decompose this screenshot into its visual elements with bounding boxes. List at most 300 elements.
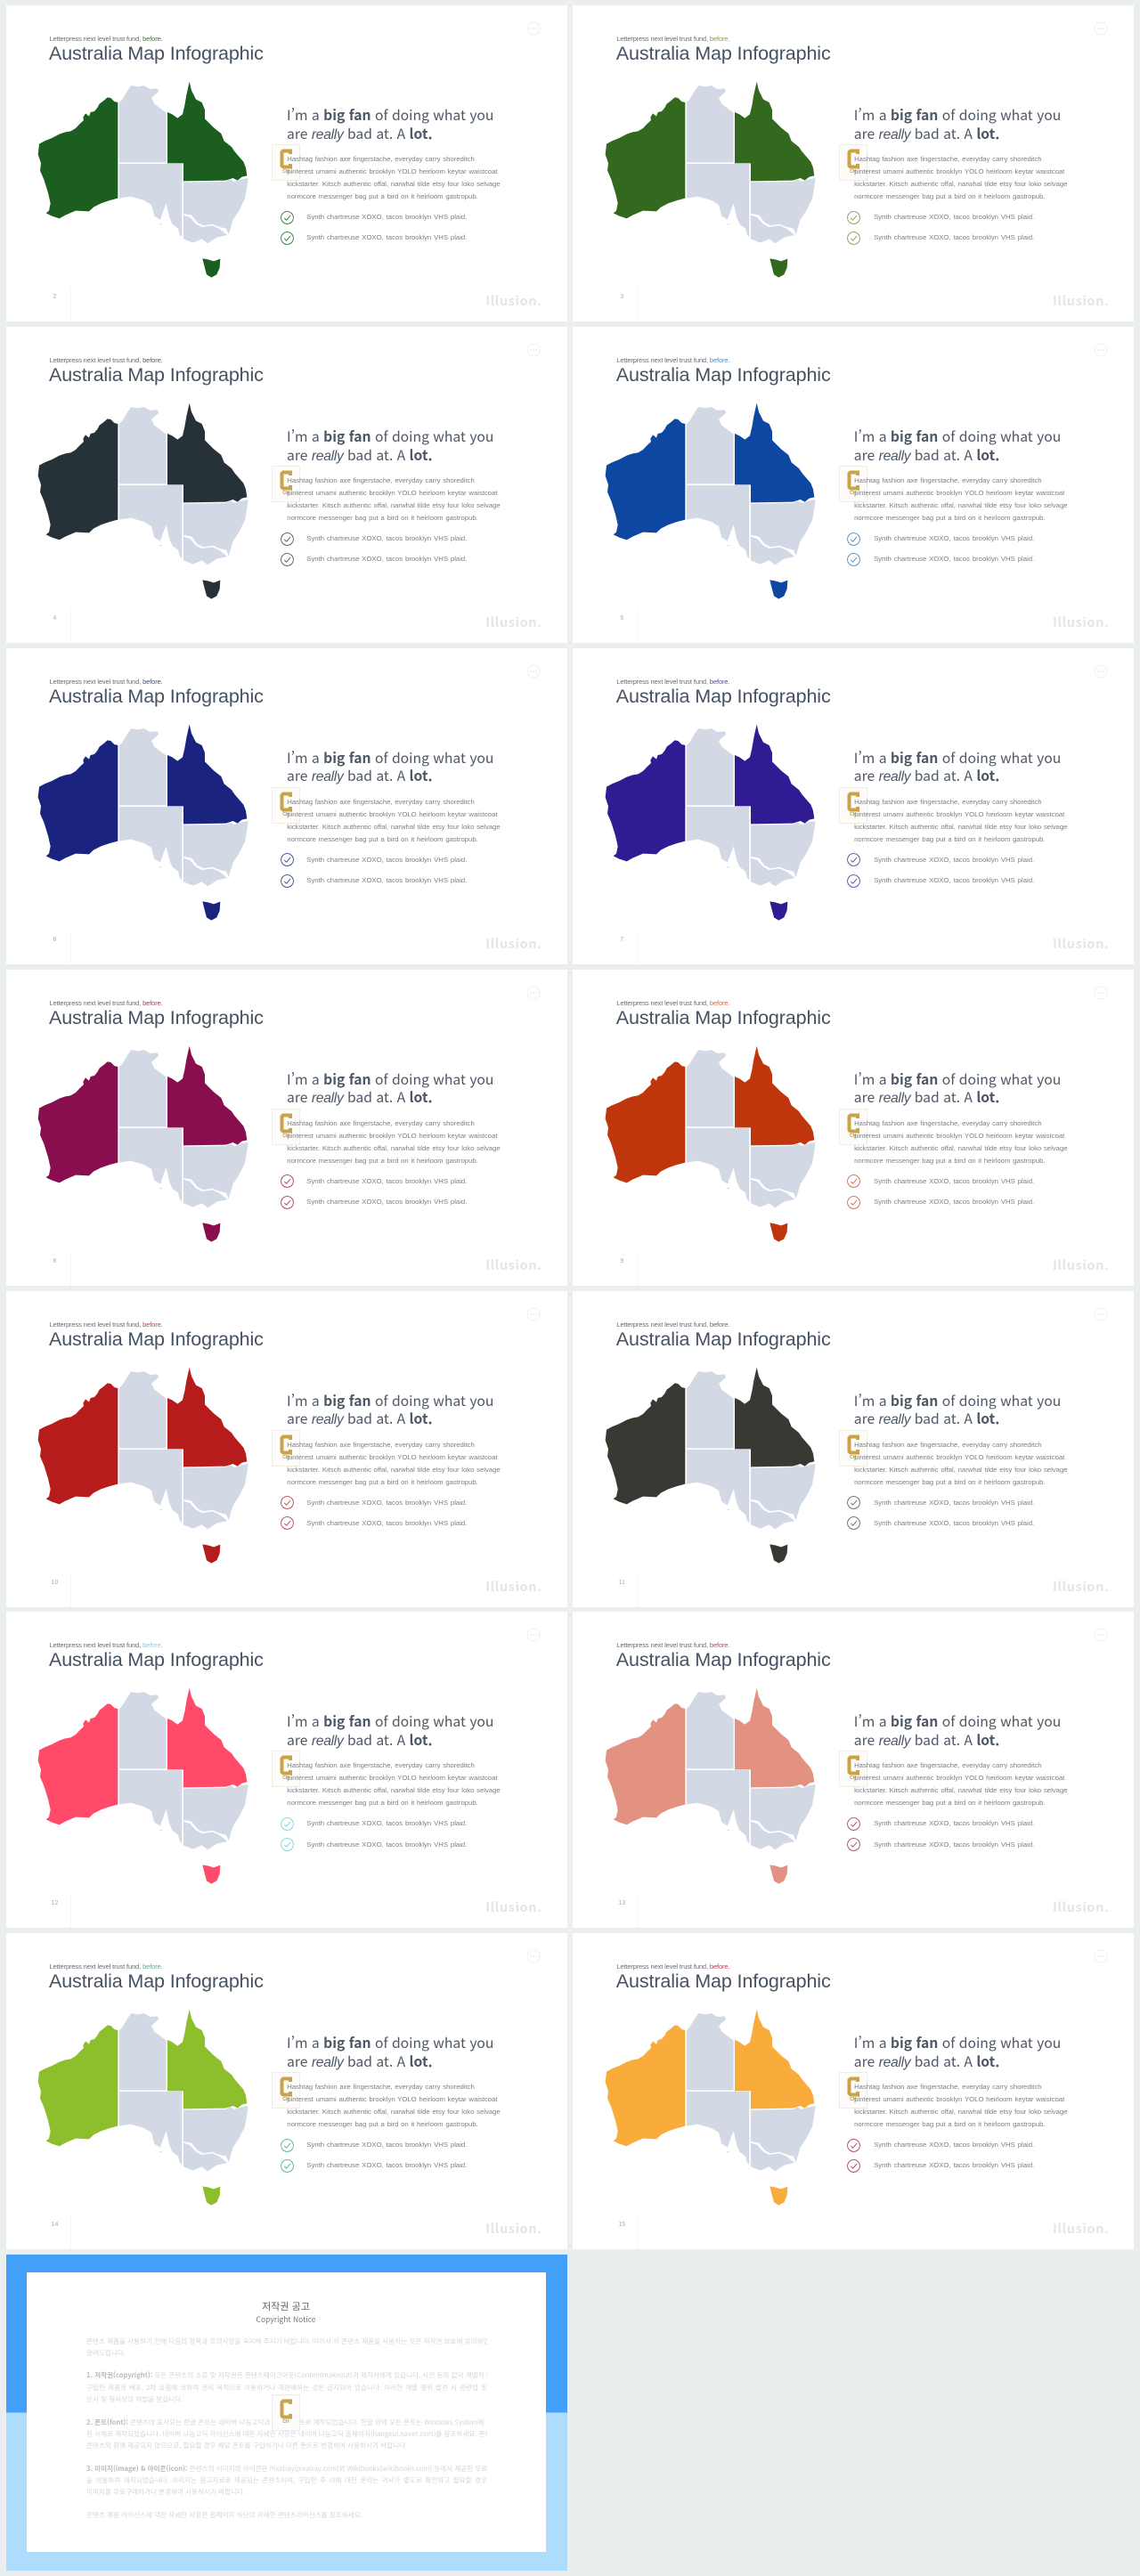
list item 2: Synth chartreuse XOXO, tacos brooklyn VHS plaid.	[874, 1519, 1034, 1527]
body text: pinterest umami authentic brooklyn YOLO heirloom keytar waistcoat	[287, 2095, 498, 2103]
list item 2: Synth chartreuse XOXO, tacos brooklyn VHS plaid.	[306, 1519, 467, 1527]
icon: menu dots	[1094, 1307, 1108, 1321]
title: Australia Map Infographic	[616, 686, 831, 707]
check icon 2	[281, 874, 294, 888]
panel: slide 11 dark olive grey	[573, 1291, 1134, 1607]
body text	[854, 476, 1068, 522]
body text: kickstarter. Kitsch authentic offal, narwhal tilde etsy four loko selvage	[287, 2108, 501, 2116]
list item 1: Synth chartreuse XOXO, tacos brooklyn VHS plaid.	[874, 2141, 1034, 2149]
watermark badge	[839, 787, 867, 824]
eyebrow text: Letterpress next level trust fund, before.	[616, 35, 729, 43]
watermark badge: CH	[282, 1455, 289, 1460]
page number: 2	[53, 294, 56, 300]
watermark badge: CH	[850, 1455, 856, 1460]
map of Australia	[37, 402, 248, 599]
footer rule	[70, 1573, 71, 1607]
watermark badge: CH	[282, 169, 289, 175]
list item 2: Synth chartreuse XOXO, tacos brooklyn VHS plaid.	[874, 1841, 1034, 1849]
map of Australia	[606, 82, 816, 278]
body text: normcore messenger bag put a bird on it heirloom gastropub.	[287, 1478, 478, 1486]
icon: menu dots	[526, 986, 541, 1000]
panel: slide 2 dark green	[5, 5, 566, 321]
logo: Illusion.	[1053, 2219, 1109, 2238]
list item 1: Synth chartreuse XOXO, tacos brooklyn VHS plaid.	[874, 1499, 1034, 1507]
title: Australia Map Infographic	[49, 1007, 264, 1028]
list item 1: Synth chartreuse XOXO, tacos brooklyn VHS plaid.	[306, 1819, 467, 1827]
title: Australia Map Infographic	[616, 1007, 831, 1028]
logo: Illusion.	[1053, 1255, 1109, 1274]
heading	[854, 747, 1061, 785]
eyebrow text: Letterpress next level trust fund, before.	[616, 678, 729, 686]
heading: are really bad at. A lot.	[854, 765, 999, 785]
map of Australia	[594, 1981, 835, 2222]
footer rule	[70, 2215, 71, 2249]
panel: slide 15 amber	[573, 1933, 1134, 2249]
body text: normcore messenger bag put a bird on it heirloom gastropub.	[287, 514, 478, 522]
logo: Illusion.	[485, 1577, 542, 1596]
list item 2: Synth chartreuse XOXO, tacos brooklyn VHS plaid.	[306, 555, 467, 563]
title: Australia Map Infographic	[616, 364, 831, 386]
list item 1: Synth chartreuse XOXO, tacos brooklyn VHS plaid.	[306, 2141, 467, 2149]
heading: I’m a big fan of doing what you	[287, 2032, 493, 2052]
icon: menu dots	[1094, 1949, 1108, 1963]
body text	[854, 1759, 1068, 1809]
body text	[854, 155, 1068, 200]
body text: pinterest umami authentic brooklyn YOLO heirloom keytar waistcoat	[854, 1774, 1064, 1782]
icon: menu dots	[526, 1307, 541, 1321]
list item 2: Synth chartreuse XOXO, tacos brooklyn VHS plaid.	[306, 2161, 467, 2169]
logo: Illusion.	[1053, 934, 1109, 953]
white notice card	[27, 2272, 546, 2552]
check icon 2	[847, 874, 860, 888]
panel: slide 5 blue	[573, 327, 1134, 643]
check icon 2	[847, 553, 860, 566]
body text: normcore messenger bag put a bird on it heirloom gastropub.	[854, 514, 1046, 522]
map of Australia	[606, 402, 816, 599]
footer rule	[638, 1573, 639, 1607]
heading	[854, 104, 1061, 142]
list item 1: Synth chartreuse XOXO, tacos brooklyn VHS plaid.	[306, 1177, 467, 1185]
list item 2: Synth chartreuse XOXO, tacos brooklyn VHS plaid.	[306, 876, 467, 884]
logo: Illusion.	[485, 613, 542, 631]
body text: pinterest umami authentic brooklyn YOLO heirloom keytar waistcoat	[854, 489, 1064, 497]
check icon 1	[847, 1817, 860, 1831]
heading: are really bad at. A lot.	[854, 443, 999, 465]
icon: menu dots	[527, 344, 540, 356]
panel: slide 4 charcoal	[5, 327, 566, 643]
body text	[287, 1759, 501, 1809]
watermark badge: CH	[850, 1134, 856, 1139]
body text: normcore messenger bag put a bird on it heirloom gastropub.	[287, 835, 478, 843]
logo: Illusion.	[1053, 1897, 1109, 1916]
heading	[287, 1392, 493, 1430]
panel: slide 8 magenta	[5, 970, 566, 1286]
icon: menu dots	[1094, 21, 1108, 36]
body text	[287, 1117, 501, 1167]
body text	[854, 1439, 1068, 1489]
footer rule	[70, 1894, 71, 1928]
eyebrow text: Letterpress next level trust fund, before.	[616, 356, 729, 364]
heading	[287, 747, 493, 785]
list item 1: Synth chartreuse XOXO, tacos brooklyn VHS plaid.	[306, 1499, 467, 1507]
check icon 2	[847, 1516, 860, 1530]
body text: Hashtag fashion axe fingerstache, everyday carry shoreditch	[854, 1761, 1042, 1769]
body text: normcore messenger bag put a bird on it heirloom gastropub.	[854, 1157, 1046, 1165]
watermark badge: CH	[850, 491, 856, 496]
body text: pinterest umami authentic brooklyn YOLO heirloom keytar waistcoat	[287, 167, 498, 175]
footer rule	[70, 930, 71, 964]
watermark badge: CH	[282, 812, 289, 817]
list item 1: Synth chartreuse XOXO, tacos brooklyn VHS plaid.	[306, 213, 467, 221]
list item 1: Synth chartreuse XOXO, tacos brooklyn VHS plaid.	[874, 1177, 1034, 1185]
body text	[287, 155, 501, 200]
title: Australia Map Infographic	[616, 1649, 831, 1670]
page number: 3	[620, 294, 623, 300]
heading: are really bad at. A lot.	[287, 765, 433, 785]
page number: 8	[53, 1258, 56, 1264]
check icon 2	[281, 553, 294, 566]
list item 2: Synth chartreuse XOXO, tacos brooklyn VHS plaid.	[306, 233, 467, 241]
icon: menu dots	[1094, 664, 1108, 679]
body text: Hashtag fashion axe fingerstache, everyday carry shoreditch	[287, 155, 475, 163]
body text: Hashtag fashion axe fingerstache, everyday carry shoreditch	[287, 798, 475, 806]
footer rule	[70, 609, 71, 643]
heading: are really bad at. A lot.	[287, 443, 433, 465]
page number: 10	[52, 1580, 58, 1586]
title: Australia Map Infographic	[49, 43, 264, 64]
body text: pinterest umami authentic brooklyn YOLO heirloom keytar waistcoat	[287, 810, 498, 818]
body text	[287, 798, 501, 843]
body text: Hashtag fashion axe fingerstache, everyday carry shoreditch	[854, 1441, 1042, 1449]
title: Australia Map Infographic	[616, 1329, 831, 1350]
watermark badge	[272, 1751, 300, 1787]
body text: normcore messenger bag put a bird on it heirloom gastropub.	[287, 1799, 478, 1807]
body text	[854, 798, 1068, 843]
watermark badge	[272, 466, 300, 502]
body text: Hashtag fashion axe fingerstache, everyday carry shoreditch	[854, 155, 1042, 163]
panel: slide 6 navy	[5, 648, 566, 964]
panel: slide 14 lime	[5, 1933, 566, 2249]
map of Australia	[27, 1981, 267, 2222]
check icon 1	[281, 211, 294, 224]
eyebrow text: Letterpress next level trust fund, before.	[50, 35, 163, 43]
footer rule	[638, 288, 639, 321]
heading: are really bad at. A lot.	[854, 123, 999, 142]
heading: I’m a big fan of doing what you	[854, 2032, 1061, 2052]
map of Australia	[27, 1339, 267, 1580]
eyebrow text: Letterpress next level trust fund, before.	[616, 1321, 729, 1329]
page number: 6	[53, 937, 56, 943]
map of Australia	[27, 1660, 267, 1900]
heading: I’m a big fan of doing what you	[287, 747, 493, 768]
body text: Hashtag fashion axe fingerstache, everyday carry shoreditch	[854, 798, 1042, 806]
watermark badge	[839, 144, 867, 181]
panel: slide 7 indigo	[573, 648, 1134, 964]
title: Australia Map Infographic	[49, 1649, 264, 1670]
watermark badge	[839, 1109, 867, 1145]
eyebrow text: Letterpress next level trust fund, before.	[50, 1641, 163, 1649]
watermark badge	[839, 1430, 867, 1467]
icon: menu dots	[526, 1949, 541, 1963]
list item 1: Synth chartreuse XOXO, tacos brooklyn VHS plaid.	[306, 856, 467, 864]
list item 2: Synth chartreuse XOXO, tacos brooklyn VHS plaid.	[874, 876, 1034, 884]
heading	[854, 1712, 1061, 1751]
eyebrow text: Letterpress next level trust fund, before.	[50, 356, 163, 364]
list item 2: Synth chartreuse XOXO, tacos brooklyn VHS plaid.	[874, 555, 1034, 563]
watermark badge	[272, 144, 300, 181]
body text: pinterest umami authentic brooklyn YOLO heirloom keytar waistcoat	[287, 489, 498, 497]
check icon 1	[847, 1496, 860, 1509]
body text: kickstarter. Kitsch authentic offal, narwhal tilde etsy four loko selvage	[854, 2108, 1068, 2116]
body text: normcore messenger bag put a bird on it heirloom gastropub.	[287, 2120, 478, 2128]
title: Australia Map Infographic	[616, 43, 831, 64]
eyebrow text: Letterpress next level trust fund, before.	[616, 1962, 729, 1971]
logo: Illusion.	[1053, 613, 1109, 631]
body text: normcore messenger bag put a bird on it heirloom gastropub.	[854, 1478, 1046, 1486]
check icon 2	[280, 1516, 294, 1530]
body text: pinterest umami authentic brooklyn YOLO heirloom keytar waistcoat	[287, 1132, 498, 1140]
heading: notice title: 저작권 공고	[262, 2299, 310, 2313]
panel: slide 13 salmon	[573, 1612, 1134, 1928]
body text	[287, 2081, 501, 2131]
heading: I’m a big fan of doing what you	[854, 104, 1061, 125]
body text: normcore messenger bag put a bird on it heirloom gastropub.	[287, 192, 478, 200]
body text: pinterest umami authentic brooklyn YOLO heirloom keytar waistcoat	[854, 810, 1064, 818]
page number: 9	[620, 1258, 623, 1264]
list item 1: Synth chartreuse XOXO, tacos brooklyn VHS plaid.	[874, 1819, 1034, 1827]
logo: Illusion.	[485, 934, 542, 953]
watermark badge: CH	[282, 1776, 289, 1781]
check icon 1	[847, 532, 860, 546]
footer rule	[70, 288, 71, 321]
body text: kickstarter. Kitsch authentic offal, narwhal tilde etsy four loko selvage	[287, 501, 501, 509]
body text: normcore messenger bag put a bird on it heirloom gastropub.	[854, 835, 1046, 843]
watermark badge on notice	[272, 2394, 300, 2431]
check icon 2	[280, 1196, 294, 1209]
body text: Hashtag fashion axe fingerstache, everyday carry shoreditch	[287, 476, 475, 484]
map of Australia	[594, 1660, 835, 1900]
eyebrow text: Letterpress next level trust fund, before.	[50, 999, 163, 1007]
check icon 1	[280, 1496, 294, 1509]
heading	[854, 2034, 1061, 2072]
map of Australia	[37, 725, 248, 921]
list item 2: Synth chartreuse XOXO, tacos brooklyn VHS plaid.	[306, 1841, 467, 1849]
heading: are really bad at. A lot.	[287, 1729, 433, 1750]
heading: are really bad at. A lot.	[854, 2051, 999, 2071]
logo: Illusion.	[485, 1897, 542, 1916]
watermark badge: CH	[282, 1134, 289, 1139]
heading: are really bad at. A lot.	[854, 1408, 999, 1428]
watermark badge: CH	[850, 169, 856, 175]
heading	[287, 104, 493, 142]
page number: 4	[53, 615, 56, 622]
footer rule	[638, 2215, 639, 2249]
body text: Hashtag fashion axe fingerstache, everyday carry shoreditch	[287, 1761, 475, 1769]
panel: slide 9 burnt orange	[573, 970, 1134, 1286]
check icon 1	[280, 2139, 294, 2152]
body text: kickstarter. Kitsch authentic offal, narwhal tilde etsy four loko selvage	[854, 1466, 1068, 1474]
heading: I’m a big fan of doing what you	[854, 1069, 1061, 1089]
heading	[287, 1712, 493, 1751]
eyebrow text: Letterpress next level trust fund, before.	[50, 678, 163, 686]
body text: normcore messenger bag put a bird on it heirloom gastropub.	[287, 1157, 478, 1165]
check icon 1	[847, 2139, 860, 2152]
eyebrow text: Letterpress next level trust fund, before.	[616, 999, 729, 1007]
eyebrow text: Letterpress next level trust fund, before.	[50, 1962, 163, 1971]
list item 1: Synth chartreuse XOXO, tacos brooklyn VHS plaid.	[874, 856, 1034, 864]
page number: 12	[52, 1900, 58, 1906]
footer rule	[638, 1894, 639, 1928]
body text: kickstarter. Kitsch authentic offal, narwhal tilde etsy four loko selvage	[854, 501, 1068, 509]
check icon 1	[280, 1817, 294, 1831]
page number: 7	[620, 937, 623, 943]
watermark badge	[839, 2072, 867, 2109]
logo: Illusion.	[1053, 291, 1109, 310]
check icon 1	[847, 853, 860, 866]
list item 2: Synth chartreuse XOXO, tacos brooklyn VHS plaid.	[306, 1198, 467, 1206]
icon: menu dots	[526, 1628, 541, 1642]
subheading: Copyright Notice: Copyright Notice	[256, 2314, 315, 2325]
body text: kickstarter. Kitsch authentic offal, narwhal tilde etsy four loko selvage	[854, 180, 1068, 188]
body text: pinterest umami authentic brooklyn YOLO heirloom keytar waistcoat	[287, 1774, 498, 1782]
logo: Illusion.	[1053, 1577, 1109, 1596]
watermark badge: CH	[850, 2097, 856, 2102]
watermark badge	[272, 2072, 300, 2109]
page number: 5	[620, 615, 623, 622]
body text	[287, 476, 501, 522]
body text: Hashtag fashion axe fingerstache, everyday carry shoreditch	[287, 2083, 475, 2091]
page number: 14	[52, 2222, 58, 2228]
footer rule	[638, 1252, 639, 1286]
watermark badge on notice: CH	[282, 2419, 289, 2425]
logo: Illusion.	[485, 2219, 542, 2238]
heading: I’m a big fan of doing what you	[287, 1711, 493, 1731]
panel: copyright notice	[5, 2255, 566, 2571]
check icon 2	[280, 2159, 294, 2173]
body text: Hashtag fashion axe fingerstache, everyday carry shoreditch	[854, 476, 1042, 484]
heading: are really bad at. A lot.	[287, 1408, 433, 1428]
heading: are really bad at. A lot.	[854, 1729, 999, 1750]
watermark badge: CH	[282, 491, 289, 496]
heading	[287, 2034, 493, 2072]
title: Australia Map Infographic	[616, 1971, 831, 1992]
list item 1: Synth chartreuse XOXO, tacos brooklyn VHS plaid.	[874, 534, 1034, 542]
watermark badge	[839, 1751, 867, 1787]
check icon 2	[847, 2159, 860, 2173]
map of Australia	[594, 1018, 835, 1258]
body text: kickstarter. Kitsch authentic offal, narwhal tilde etsy four loko selvage	[287, 823, 501, 831]
body text: kickstarter. Kitsch authentic offal, narwhal tilde etsy four loko selvage	[287, 1144, 501, 1152]
body text: kickstarter. Kitsch authentic offal, narwhal tilde etsy four loko selvage	[854, 823, 1068, 831]
heading: are really bad at. A lot.	[287, 2051, 433, 2071]
body text: kickstarter. Kitsch authentic offal, narwhal tilde etsy four loko selvage	[287, 1786, 501, 1794]
map of Australia	[594, 1339, 835, 1580]
icon: menu dots	[1094, 344, 1108, 356]
heading	[854, 1392, 1061, 1430]
body text	[287, 1439, 501, 1489]
body text: Hashtag fashion axe fingerstache, everyday carry shoreditch	[287, 1441, 475, 1449]
watermark badge: CH	[282, 2097, 289, 2102]
body text: Hashtag fashion axe fingerstache, everyday carry shoreditch	[854, 1119, 1042, 1127]
title: Australia Map Infographic	[49, 1971, 264, 1992]
icon: menu dots	[527, 21, 540, 36]
body text: kickstarter. Kitsch authentic offal, narwhal tilde etsy four loko selvage	[854, 1144, 1068, 1152]
check icon 2	[847, 1196, 860, 1209]
check icon 2	[281, 232, 294, 245]
watermark badge	[272, 787, 300, 824]
heading	[854, 1070, 1061, 1109]
body text: pinterest umami authentic brooklyn YOLO heirloom keytar waistcoat	[854, 1453, 1064, 1461]
body text: kickstarter. Kitsch authentic offal, narwhal tilde etsy four loko selvage	[287, 1466, 501, 1474]
icon: menu dots	[1094, 1628, 1108, 1642]
footer rule	[70, 1252, 71, 1286]
watermark badge: CH	[850, 812, 856, 817]
eyebrow text: Letterpress next level trust fund, before.	[50, 1321, 163, 1329]
panel: slide 10 red	[5, 1291, 566, 1607]
body text: Hashtag fashion axe fingerstache, everyday carry shoreditch	[854, 2083, 1042, 2091]
list item 2: Synth chartreuse XOXO, tacos brooklyn VHS plaid.	[874, 233, 1034, 241]
body text: kickstarter. Kitsch authentic offal, narwhal tilde etsy four loko selvage	[854, 1786, 1068, 1794]
heading: are really bad at. A lot.	[287, 1086, 433, 1107]
map of Australia	[27, 1018, 267, 1258]
body text: normcore messenger bag put a bird on it heirloom gastropub.	[854, 1799, 1046, 1807]
map of Australia	[37, 82, 248, 278]
body text: kickstarter. Kitsch authentic offal, narwhal tilde etsy four loko selvage	[287, 180, 501, 188]
heading	[287, 1070, 493, 1109]
body text: Hashtag fashion axe fingerstache, everyday carry shoreditch	[287, 1119, 475, 1127]
heading: I’m a big fan of doing what you	[854, 1390, 1061, 1410]
list item 1: Synth chartreuse XOXO, tacos brooklyn VHS plaid.	[874, 213, 1034, 221]
heading: I’m a big fan of doing what you	[287, 1069, 493, 1089]
title: Australia Map Infographic	[49, 1329, 264, 1350]
heading: I’m a big fan of doing what you	[854, 747, 1061, 768]
title: Australia Map Infographic	[49, 364, 264, 386]
body text: pinterest umami authentic brooklyn YOLO heirloom keytar waistcoat	[287, 1453, 498, 1461]
footer rule	[638, 609, 639, 643]
watermark badge: CH	[850, 1776, 856, 1781]
list item 2: Synth chartreuse XOXO, tacos brooklyn VHS plaid.	[874, 1198, 1034, 1206]
watermark badge	[272, 1430, 300, 1467]
body text	[854, 2081, 1068, 2131]
icon: menu dots	[527, 664, 540, 679]
check icon 1	[847, 1174, 860, 1188]
heading	[854, 426, 1061, 465]
check icon 1	[281, 532, 294, 546]
watermark badge	[839, 466, 867, 502]
panel: slide 3 olive green	[573, 5, 1134, 321]
heading: are really bad at. A lot.	[287, 123, 433, 142]
icon: menu dots	[1094, 986, 1108, 1000]
eyebrow text: Letterpress next level trust fund, before.	[616, 1641, 729, 1649]
body text	[854, 1117, 1068, 1167]
list item 2: Synth chartreuse XOXO, tacos brooklyn VHS plaid.	[874, 2161, 1034, 2169]
body text: normcore messenger bag put a bird on it heirloom gastropub.	[854, 192, 1046, 200]
check icon 2	[847, 1838, 860, 1851]
check icon 1	[280, 1174, 294, 1188]
check icon 2	[280, 1838, 294, 1851]
page number: 11	[619, 1580, 625, 1586]
body text: pinterest umami authentic brooklyn YOLO heirloom keytar waistcoat	[854, 2095, 1064, 2103]
watermark badge	[272, 1109, 300, 1145]
map of Australia	[606, 725, 816, 921]
heading: I’m a big fan of doing what you	[287, 1390, 493, 1410]
heading: I’m a big fan of doing what you	[854, 1711, 1061, 1731]
heading: I’m a big fan of doing what you	[287, 104, 493, 125]
heading: I’m a big fan of doing what you	[287, 426, 493, 446]
list item 1: Synth chartreuse XOXO, tacos brooklyn VHS plaid.	[306, 534, 467, 542]
check icon 1	[847, 211, 860, 224]
check icon 2	[847, 232, 860, 245]
